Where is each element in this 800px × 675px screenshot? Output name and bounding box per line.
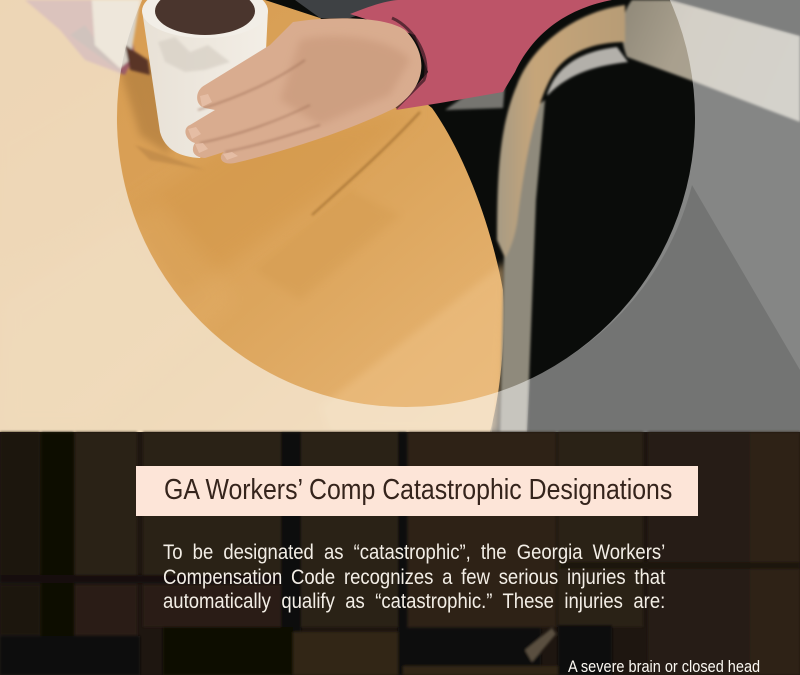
chair frame — [497, 0, 800, 432]
extra pale wash on the left table area — [0, 0, 495, 432]
mug — [142, 0, 268, 158]
left sleeve and hand — [25, 0, 150, 75]
wooden table top — [0, 0, 504, 432]
photo: hand on mug at a wooden table — [0, 0, 800, 432]
dark clothing backdrop — [0, 0, 800, 432]
mug pattern — [158, 37, 230, 72]
lower dark blocks — [0, 636, 140, 675]
tube arch in tan — [497, 5, 625, 258]
right sleeve — [350, 0, 612, 110]
cross tube — [622, 0, 800, 122]
mug body — [142, 10, 268, 158]
dark window background — [0, 432, 800, 675]
dark shirt at top — [295, 0, 400, 18]
hand shading — [280, 36, 410, 125]
vertical tube grey part — [500, 100, 545, 432]
coffee — [155, 0, 255, 35]
intro paragraph — [163, 540, 666, 613]
table shadow under mug — [120, 60, 170, 155]
upper right grey panel tone — [672, 0, 800, 36]
window bars — [41, 432, 74, 675]
intro paragraph: Compensation Code recognizes a few serious injuries that — [163, 564, 665, 588]
title banner — [136, 466, 698, 516]
white shirt behind chair — [445, 47, 628, 110]
lower right grey panel tone — [527, 185, 800, 432]
title banner: GA Workers’ Comp Catastrophic Designations — [164, 474, 672, 506]
window panes — [0, 432, 800, 675]
mug rim — [142, 0, 268, 38]
finger nails — [188, 94, 238, 160]
intro paragraph: automatically qualify as “catastrophic.” These injuries are: — [163, 589, 665, 613]
finger lines — [198, 60, 320, 152]
right hand — [185, 18, 421, 164]
intro paragraph: To be designated as “catastrophic”, the Georgia Workers’ — [163, 540, 665, 564]
sleeve cuff shadow — [392, 18, 426, 108]
white veil outside the circle — [0, 0, 800, 432]
hand shape — [185, 18, 421, 164]
table wood planks — [0, 60, 505, 432]
